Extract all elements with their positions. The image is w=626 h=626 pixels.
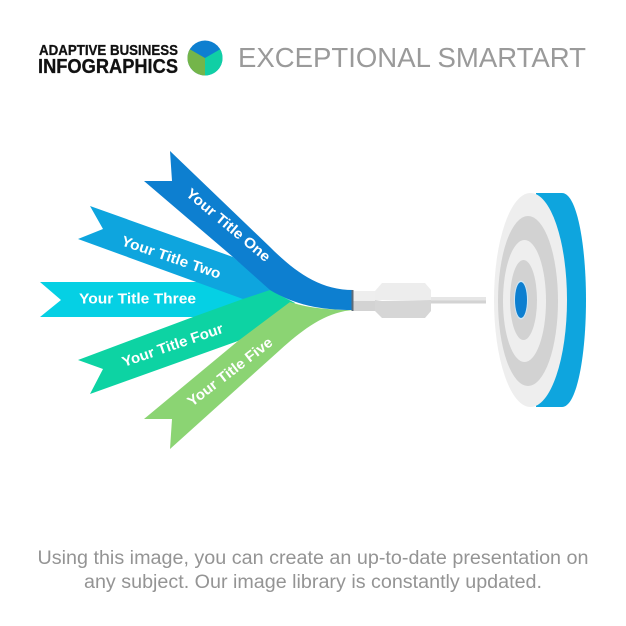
header logo text: INFOGRAPHICS: [38, 56, 178, 78]
icon: dart: [352, 283, 486, 318]
ribbon: two: Your Title Two: [119, 234, 223, 283]
ribbon: three: Your Title Three: [79, 292, 196, 308]
header logo text: ADAPTIVE BUSINESS: [39, 43, 178, 59]
icon: target: [494, 193, 586, 407]
body text: [38, 548, 588, 593]
ribbon: five: Your Title Five: [185, 335, 276, 410]
heading: EXCEPTIONAL SMARTART: [238, 42, 586, 73]
ribbon: one: [144, 151, 353, 310]
ribbon: three: [40, 282, 290, 340]
body text: Using this image, you can create an up-to-date presentation on: [38, 548, 588, 569]
ribbon: two: [78, 206, 275, 299]
header logo text: [38, 43, 178, 78]
ribbon: four: Your Title Four: [120, 321, 226, 371]
ribbon: one: Your Title One: [182, 186, 273, 266]
body text: any subject. Our image library is constantly updated.: [84, 572, 542, 593]
icon: logo pie: [187, 40, 223, 76]
ribbon: five: [144, 302, 353, 449]
ribbon: four: [78, 290, 295, 394]
